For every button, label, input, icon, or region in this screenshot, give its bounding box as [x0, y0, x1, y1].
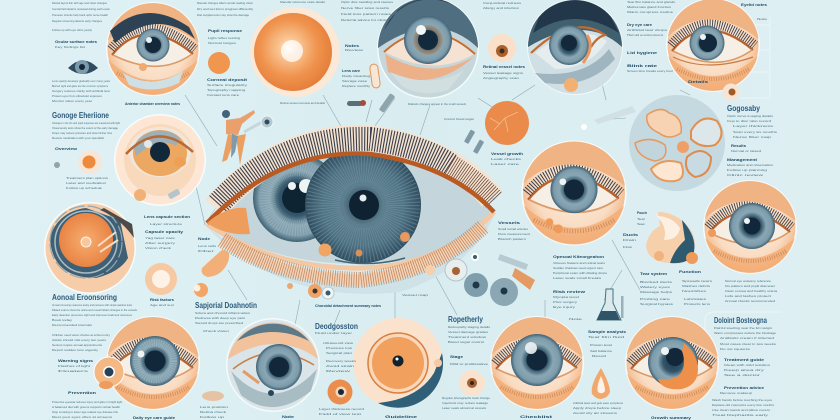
heading: Gogosaby: Gogosaby — [727, 104, 760, 113]
text block: below right middle eye: Sudden shadows need urgent care — [553, 266, 603, 270]
text block: right of far right eye: Normal eye anatomy reference — [725, 279, 771, 283]
text block: under Aonoal Eroonsoring: A balanced diet with greens supports retinal health — [52, 405, 120, 409]
text block: below right middle eye: Salt balance — [590, 349, 612, 353]
text block: under Ropetherly: Regular photographs track change — [442, 396, 490, 400]
text block: under Doloint Bosteogna: Keep area dry — [724, 368, 765, 372]
text block: above Ropetherly — [498, 221, 530, 241]
text block: under Ropetherly: Blood sugar control — [448, 340, 484, 344]
text block: below right middle eye: Prior surgery — [553, 300, 578, 304]
text block: top centre right: Diabetic changes appear in the small vessels — [408, 102, 466, 106]
text block: below right middle eye: Laser seals small breaks — [553, 276, 602, 280]
text block: under Doloint Bosteogna: Prevention advice — [724, 386, 764, 390]
text block: top column 2: Pupil response — [208, 29, 242, 33]
text block: under Gonoge Eheriione: Treatment plan options — [66, 176, 109, 180]
text block: labels under J organ: Tear system — [640, 272, 667, 276]
text block: top right of centre: Humid environment — [627, 33, 663, 37]
text block: under Aonoal Eroonsoring: Rest your eyes often at screens — [52, 415, 113, 419]
text block: under Aonoal Eroonsoring: Annual screening measures acuity and pressure with simple painless tests — [52, 303, 132, 307]
text block: top centre column: Storage case — [342, 79, 367, 83]
text block: left lower labels: Vision check — [145, 246, 172, 250]
text block: left notes under small eye: Anterior chamber overview notes — [125, 102, 180, 106]
text block: labels under J organ — [623, 211, 713, 306]
text block: centre caption row: Avoid strain — [326, 364, 354, 368]
text block: right of far right eye: Clear cornea and healthy sclera — [725, 289, 777, 293]
eye white — [207, 154, 494, 264]
text block: top centre right: Control blood sugar — [444, 117, 474, 121]
text block: centre caption row: Field of view test — [319, 412, 361, 416]
icon: screws — [464, 129, 484, 154]
text block: below right middle eye: Protein level — [590, 343, 612, 347]
text block: under Sapjorial Doahnotin: Sclera and choroid inflammation — [195, 311, 250, 315]
text block: above Ropetherly: Flow measurement — [498, 232, 530, 236]
text block: centre caption row: Choroidal detachment summary notes — [315, 304, 381, 308]
heading: Aonoal Eroonsoring: Aonoal Eroonsoring — [52, 293, 117, 302]
text block: left lower labels: Layer structure — [150, 222, 182, 226]
leader lines and frames — [130, 17, 782, 360]
text block: under Ropetherly: Checklist — [520, 415, 554, 419]
text block: top centre right: Vessel leakage signs — [483, 71, 524, 75]
text block: below right middle eye: Artificial tears and gels ease symptoms — [573, 401, 623, 405]
text block: top right of centre: Warm compress routine — [627, 10, 673, 14]
text block: top centre column: Nerve fiber scan results — [341, 6, 390, 10]
text block: labels under J organ: Flow — [623, 245, 633, 249]
icon: small gray eyeballs — [425, 253, 518, 306]
text block: right of far right eye: Iris pattern and pupil diameter — [725, 284, 775, 288]
text block: under Ropetherly: Laser seals abnormal vessels — [442, 406, 486, 410]
text block: top centre right: Leak checks — [491, 157, 522, 161]
text block: top centre column: Referral advice for clinic — [341, 18, 388, 22]
icon: surgeon figure with instrument — [222, 110, 273, 165]
text block: top centre right: Allergy and infection — [483, 6, 519, 10]
text block: under Ropetherly — [385, 325, 554, 419]
text block: above Ropetherly: Vessels — [498, 221, 520, 225]
icon: small peach eye with mouth — [94, 357, 124, 389]
text block: left lower labels — [144, 215, 217, 307]
text block: under Doloint Bosteogna: See a doctor — [724, 373, 760, 377]
text block: under Ropetherly: Stage — [450, 355, 463, 359]
text block: below right middle eye: Vitreous floaters and retinal tears — [553, 261, 606, 265]
panel: main central eye — [205, 138, 496, 294]
text block: under Aonoal Eroonsoring: Dilated exams show the retina and reveal hidden changes in the vessels — [52, 308, 137, 312]
text block: top left notes — [52, 1, 110, 49]
text block: under Doloint Bosteogna: Warm compresses reduce the blockage — [714, 331, 776, 335]
lens sheath — [205, 212, 496, 294]
icon: amber ball left middle — [54, 150, 102, 174]
text block: top left notes: Follow up with eye clinic yearly — [52, 28, 92, 32]
text block: left notes under small eye: Protect eyes from ultraviolet exposure — [52, 94, 102, 98]
panel: eye top right — [666, 0, 760, 95]
text block: below right middle eye — [553, 261, 626, 415]
text block: labels under J organ: Nourishes — [682, 289, 707, 293]
text block: under Ropetherly: Mild to proliferative — [450, 362, 488, 366]
upper lashes dark — [218, 139, 450, 204]
text block: below right middle eye: Sample analysis — [588, 330, 626, 334]
text block: labels under J organ: Watery eyes — [640, 285, 671, 289]
text block: top column 2: Retina vessel overview and details — [280, 101, 325, 105]
text block: labels under J organ: Tear — [637, 217, 645, 221]
text block: under Doloint Bosteogna: Remove makeup — [720, 391, 752, 395]
text block: top right of centre: Screen time breaks every hour — [627, 69, 673, 73]
text block: under Gonoge Eheriione: Changes in the iris and pupil response are measured with light — [52, 121, 120, 125]
text block: under Gonoge Eheriione: Review medication with your specialist — [52, 136, 104, 140]
text block: under Doloint Bosteogna: Use clean towels and pillow covers — [712, 408, 771, 412]
text block: under Doloint Bosteogna: Antibiotic cream if infected — [720, 336, 774, 340]
text block: labels under J organ: Probing care — [640, 297, 670, 301]
text block: top centre right — [408, 1, 525, 166]
text block: top centre column: Field loss pattern notes — [341, 12, 392, 16]
text block: top left notes: Central field detail is reviewed during each exam — [52, 7, 110, 11]
text block: centre caption row: Fluid under layer — [315, 331, 352, 335]
text block: left lower labels: After surgery — [145, 241, 176, 245]
small orange nodes — [318, 244, 332, 256]
text block: below right middle eye: Peripheral exam with dilating drops — [553, 271, 608, 275]
text block: labels under J organ: Pouch — [637, 211, 647, 215]
panel: eye lower row 3 — [490, 316, 584, 413]
text block: centre caption row: Vessel map — [402, 293, 428, 297]
text block: top right of centre: Dry eye care — [627, 23, 652, 27]
panel: eye left middle, amber iris — [114, 114, 206, 206]
heading: Deodgosston: Deodgosston — [315, 322, 358, 331]
text block: top column 2: Macular reference scale details — [280, 0, 325, 4]
text block: below right middle eye: Result — [592, 354, 606, 358]
text block: top centre column: Replace monthly — [342, 84, 371, 88]
text block: under Sapjorial Doahnotin: Lens position — [200, 405, 228, 409]
text block: top left notes: Pressure checks help track optic nerve health — [52, 13, 108, 17]
text block: right of far right eye: Lids and lashes protect — [725, 294, 771, 298]
text block: top left notes: Retinal layers thin with age and vision changes — [52, 1, 107, 5]
text block: under Aonoal Eroonsoring: Prevention — [68, 391, 96, 395]
irises clipped to the eye opening — [253, 147, 421, 263]
text block: centre caption row — [282, 293, 428, 419]
text block: above Ropetherly: Small retinal arteries — [498, 227, 528, 231]
text block: left lower labels: Fiber — [198, 249, 214, 253]
text block: left notes under small eye: Monitor vision every year — [52, 99, 92, 103]
text block: labels under J organ: Lubricates — [684, 297, 707, 301]
text block: under Gogosaby: Cup to disc ratio record — [727, 119, 771, 123]
text block: labels under J organ: Spreads tears — [682, 279, 713, 283]
text block: under Aonoal Eroonsoring: Warning signs — [58, 359, 93, 363]
lower lid band and lashes — [207, 212, 494, 268]
text block: under Doloint Bosteogna: Clean with mild solution — [724, 363, 770, 367]
text block: top column 2: Light reflex testing — [208, 36, 240, 40]
text block: under Doloint Bosteogna: Most cases clear in two weeks — [720, 342, 777, 346]
text block: under Ropetherly: Retinopathy staging details — [448, 325, 491, 329]
text block: left lower labels: Age and sun — [150, 303, 174, 307]
text block: under Gonoge Eheriione: Overview — [55, 147, 78, 151]
text block: under Doloint Bosteogna: Treatment guide — [724, 358, 764, 362]
text block: under Doloint Bosteogna: Treat blepharitis early — [712, 413, 769, 417]
icon: tube top right of disc — [581, 106, 636, 130]
text block: under Gogosaby: Optic nerve imaging details — [727, 114, 774, 118]
text block: top centre right: Angiography scan — [483, 76, 519, 80]
text block: under Sapjorial Doahnotin: Follow up — [200, 415, 224, 419]
text block: under Doloint Bosteogna: Growth summary — [651, 416, 691, 420]
text block: under Ropetherly: Injections may reduce leakage — [442, 401, 488, 405]
icon: small lens lower — [202, 391, 224, 401]
text block: top column 2: Macular changes affect central reading vision — [197, 1, 253, 5]
text block: top column 2: Surface irregularity — [207, 83, 248, 87]
icon: pill capsule — [369, 64, 381, 88]
icon: small almond eye — [68, 60, 98, 74]
text block: under Doloint Bosteogna: Replace old cosmetics every few months — [712, 403, 774, 407]
icon: peach blobs — [194, 250, 229, 297]
panel: eye top 4 — [527, 0, 623, 95]
text block: under Aonoal Eroonsoring: Protective eyewear reduces injury and glare in bright light — [52, 400, 122, 404]
text block: top right of centre: Lid hygiene — [627, 51, 657, 55]
text block: under Aonoal Eroonsoring: Report sudden loss urgently — [52, 348, 99, 352]
text block: labels under J organ: Function — [679, 270, 701, 274]
text block: top column 2: Normal ranges — [208, 41, 237, 45]
text block: below right middle eye: Avoid dry air streams — [573, 411, 618, 415]
text block: under Ropetherly: Guideline — [385, 415, 417, 419]
text block: under Aonoal Eroonsoring — [52, 303, 137, 419]
text block: under Aonoal Eroonsoring: Seniors require annual appointments — [52, 343, 102, 347]
text block: under Aonoal Eroonsoring: Floaters — [58, 369, 89, 373]
icon: droplet — [592, 368, 610, 399]
icon: orange ball with eye — [328, 380, 352, 404]
text block: under Gonoge Eheriione: Visual acuity tests show the extent of the early damage — [52, 126, 118, 130]
text block: left notes under small eye — [52, 79, 180, 106]
text block: top right labels: Eyelid notes — [741, 3, 767, 7]
text block: top right labels — [688, 3, 767, 84]
text block: below right middle eye: Eye injury — [553, 305, 576, 309]
text block: above Ropetherly: Branch pattern — [498, 237, 526, 241]
text block: under Gogosaby: Clinic review — [727, 173, 765, 177]
text block: under Gonoge Eheriione: Follow up schedule — [66, 186, 102, 190]
text block: centre caption row: Note — [282, 415, 294, 419]
text block: under Gogosaby: Follow up planning — [727, 168, 767, 172]
text block: under Gogosaby — [727, 114, 778, 177]
upper lid orange band — [207, 154, 494, 223]
icon: cream eyeball — [459, 370, 485, 396]
text block: under Sapjorial Doahnotin: Steroid drops are prescribed — [195, 321, 243, 325]
text block: left lower labels: Risk factors — [150, 298, 174, 302]
text block: left notes under small eye: Lens opacity develops gradually over many years — [52, 79, 110, 83]
text block: labels under J organ: Drain — [623, 238, 636, 242]
text block: top right of centre: Blink rate — [627, 64, 657, 68]
text block: top column 2 — [197, 0, 325, 105]
text block: top right of centre: Tear film balance and glands — [627, 0, 676, 4]
text block: left lower labels: Lens cells — [198, 244, 217, 248]
text block: under Gogosaby: Management — [727, 158, 758, 162]
icon: small orange eyeball row — [287, 283, 334, 299]
text block: under Sapjorial Doahnotin: Check vision — [203, 329, 229, 333]
text block: under Gogosaby: Results — [731, 144, 746, 148]
text block: under Aonoal Eroonsoring: Flashes of light — [58, 364, 90, 368]
panel: gray disc with organs — [629, 95, 725, 191]
text block: labels under J organ: Blocked ducts — [640, 280, 673, 284]
icon: cream ball with dark centre, top — [488, 34, 516, 62]
text block: centre caption row: Pressure low — [326, 346, 353, 350]
text block: under Gogosaby: Scan every six months — [733, 130, 778, 134]
text block: top centre column: Optic disc swelling and causes — [341, 0, 394, 4]
text block: under Gonoge Eheriione: Drops may reduce pressure and slow further loss — [52, 131, 112, 135]
icon: orange ball — [208, 52, 230, 74]
text block: centre caption row: Layer thickness record — [319, 407, 364, 411]
panel: eye top middle — [377, 0, 479, 99]
panel: cross-section, lower left — [44, 202, 136, 294]
text block: top left notes: Ocular surface notes — [55, 40, 97, 44]
text block: under Gogosaby: Medication and observation — [727, 163, 773, 167]
text block: centre caption row: Review — [326, 369, 352, 373]
inner corner — [207, 208, 250, 234]
text block: labels under J organ: Massage helps — [640, 290, 673, 294]
heading: Opesoal Kiteorgeahon: Opesoal Kiteorgeahon — [553, 254, 605, 259]
text block: left lower labels: Lens capsule section — [144, 215, 190, 219]
panel: eye far right — [703, 180, 797, 277]
text block: below right middle eye: Risk review — [553, 290, 586, 294]
text block: under Sapjorial Doahnotin: Redness with deep eye pain — [195, 316, 245, 320]
text block: top right of centre: Meibomian gland function — [627, 5, 671, 9]
text block: under Doloint Bosteogna — [651, 326, 777, 420]
text block: top right labels: Note — [757, 17, 767, 21]
text block: top right labels: Details — [688, 80, 708, 84]
text block: top column 2: Dry and wet forms progress differently — [197, 7, 253, 11]
text block: under Ropetherly: Vessel damage grades — [448, 330, 489, 334]
text block: left lower labels: Node — [198, 237, 210, 241]
icon: flask — [597, 289, 624, 320]
text block: labels under J organ: Ducts — [623, 233, 638, 237]
text block: top column 2: Topography mapping — [207, 88, 245, 92]
text block: below right middle eye: Myopia level — [553, 295, 579, 299]
text block: labels under J organ: Surgical bypass — [640, 302, 674, 306]
text block: labels under J organ: Washes debris — [682, 284, 711, 288]
text block: under Ropetherly: Treatment window — [448, 335, 487, 339]
text block: top column 2: Diet supplements may slow the damage — [197, 13, 249, 17]
text block: labels under J organ: Protects lens — [684, 302, 711, 306]
text block: top centre column: Notes — [345, 44, 359, 48]
text block: under Aonoal Eroonsoring: Book today — [52, 318, 73, 322]
panel: eye lower row 1 — [106, 316, 200, 413]
icon: veined orange disc — [485, 101, 529, 145]
text block: under Aonoal Eroonsoring: Children need vision checks at school entry — [52, 333, 110, 337]
text block: top centre right: Conjunctival redness — [483, 1, 522, 5]
heading: Doloint Bosteogna: Doloint Bosteogna — [714, 316, 767, 325]
text block: left lower labels: Capsule opacity — [145, 230, 183, 234]
text block: top centre column: Daily cleaning — [342, 74, 370, 78]
text block: left notes under small eye: Blurred sight and glare are the common symptoms — [52, 84, 108, 88]
icon: syringe tool — [499, 257, 535, 290]
text block: top column 2: Contact lens care — [207, 93, 239, 97]
text block: centre caption row: Surgical plan — [326, 351, 352, 355]
text block: under Gonoge Eheriione: Laser and medication — [66, 181, 106, 185]
icon: speckled ball — [145, 263, 177, 295]
text block: top right of centre — [627, 0, 676, 73]
text block: below right middle eye: Apply drops before sleep — [573, 406, 621, 410]
text block: under Sapjorial Doahnotin: Retina check — [200, 410, 227, 414]
text block: top centre column — [341, 0, 394, 88]
text block: under Gogosaby: Nerve fiber map — [733, 135, 771, 139]
text block: top left notes: Regular screening detects early changes — [52, 19, 102, 23]
text block: under Sapjorial Doahnotin: Daily eye care guide — [133, 416, 175, 420]
text block: centre caption row: Ultrasound view — [323, 341, 354, 345]
panel: eye lower row 2 — [226, 318, 320, 412]
text block: top centre column: Review — [345, 48, 364, 52]
panel: eye top left — [106, 2, 200, 99]
text block: left lower labels: Yag laser care — [145, 236, 175, 240]
text block: under Gonoge Eheriione — [52, 121, 120, 190]
text block: under Sapjorial Doahnotin — [133, 311, 250, 420]
text block: left notes under small eye: Surgery restores clarity with artificial lens — [52, 89, 110, 93]
icon: gray tubes — [347, 93, 395, 113]
text block: under Aonoal Eroonsoring: Early detection preserves sight and improves treatment outcomes — [52, 313, 132, 317]
text block: top centre right: Laser care — [491, 162, 520, 166]
text block: under Gogosaby: Normal or raised — [731, 149, 761, 153]
text block: under Gogosaby: Layer thickness — [733, 124, 774, 128]
panel: eye lower row 4 with orange growth — [625, 316, 719, 413]
text block: below right middle eye: Tear film fluid — [588, 335, 625, 339]
text block: right of far right eye: Annual checks recommended — [725, 299, 775, 303]
text block: top right of centre: Artificial tear drops — [627, 28, 668, 32]
text block: below right middle eye: Note — [569, 317, 583, 321]
text block: under Aonoal Eroonsoring: Recommended intervals — [52, 323, 93, 327]
icon: J shaped organ — [646, 212, 698, 264]
text block: under Doloint Bosteogna: Wash hands before touching the eyes — [712, 398, 773, 402]
heading: Gonoge Eheriione: Gonoge Eheriione — [52, 111, 109, 120]
heading: Ropetherly: Ropetherly — [448, 315, 483, 324]
panel: orange disc lower — [353, 318, 443, 408]
upper lash bed — [215, 138, 492, 208]
text block: top centre right: Retinal vessel notes — [483, 65, 525, 69]
text block: top centre right: Vessel growth — [491, 152, 523, 156]
panel: eye right middle — [521, 140, 627, 249]
text block: right of far right eye — [725, 279, 777, 303]
text block: under Aonoal Eroonsoring: Stop smoking to lower age related eye disease risk — [52, 410, 118, 414]
text block: labels under J organ: Sac — [637, 222, 646, 226]
text block: under Doloint Bosteogna: Painful swelling near the lid margin — [714, 326, 772, 330]
text block: centre caption row: Recovery weeks — [326, 359, 357, 363]
text block: top column 2: Corneal deposit — [207, 78, 248, 82]
icon: cream ball upper right — [722, 84, 740, 100]
text block: under Aonoal Eroonsoring: Adults should visit every two years — [52, 338, 107, 342]
text block: top left notes: Key findings list — [55, 45, 85, 49]
upper lashes tan right — [450, 165, 494, 200]
text block: under Doloint Bosteogna: Do not squeeze — [720, 347, 750, 351]
text block: top centre column: Lens care — [342, 69, 360, 73]
heading: Sapjorial Doahnotin: Sapjorial Doahnotin — [195, 301, 257, 310]
panel: orange disc top — [250, 7, 340, 97]
